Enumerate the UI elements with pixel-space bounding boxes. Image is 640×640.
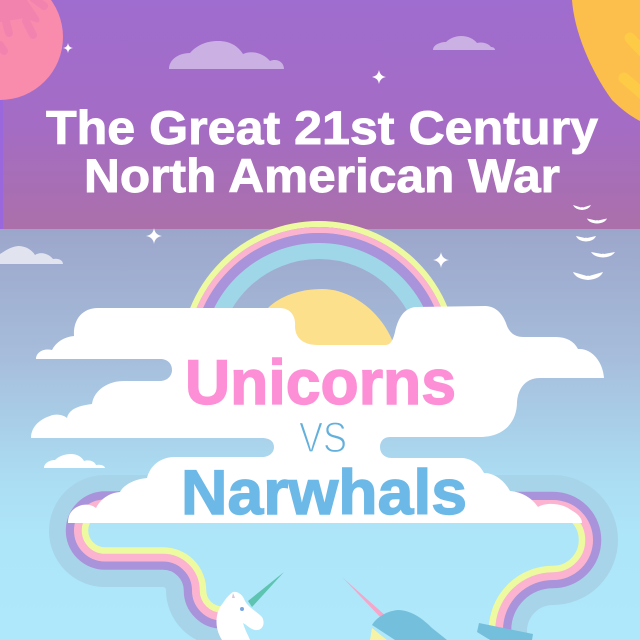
panel: large white cloud <box>31 306 604 523</box>
panel: day sky background <box>0 229 640 640</box>
title: The Great 21st Century <box>46 101 598 154</box>
title: North American War <box>84 149 560 202</box>
icon: lilac cloud right <box>433 36 495 50</box>
title <box>46 101 598 202</box>
icon: flock of birds <box>573 205 615 280</box>
heading: VS: VS <box>299 414 347 462</box>
icon: setting sun <box>268 289 393 352</box>
panel: night sky band <box>0 0 640 229</box>
icon: left rainbow trail <box>58 484 222 637</box>
icon: yellow sun planet <box>572 0 640 121</box>
icon: sky cloud left <box>0 246 63 264</box>
icon: pink planet <box>0 0 63 100</box>
icon: narwhal <box>342 577 447 640</box>
icon: top rainbow <box>183 224 455 360</box>
icon: lilac cloud left <box>169 41 284 69</box>
heading: Unicorns: Unicorns <box>185 348 456 418</box>
icon: unicorn <box>216 572 284 640</box>
icon: white small cloud <box>44 454 105 468</box>
icon: sparkle stars <box>63 43 449 268</box>
icon: narwhal tail <box>477 623 533 640</box>
heading: Narwhals: Narwhals <box>181 458 467 528</box>
icon: right rainbow trail <box>490 484 609 640</box>
